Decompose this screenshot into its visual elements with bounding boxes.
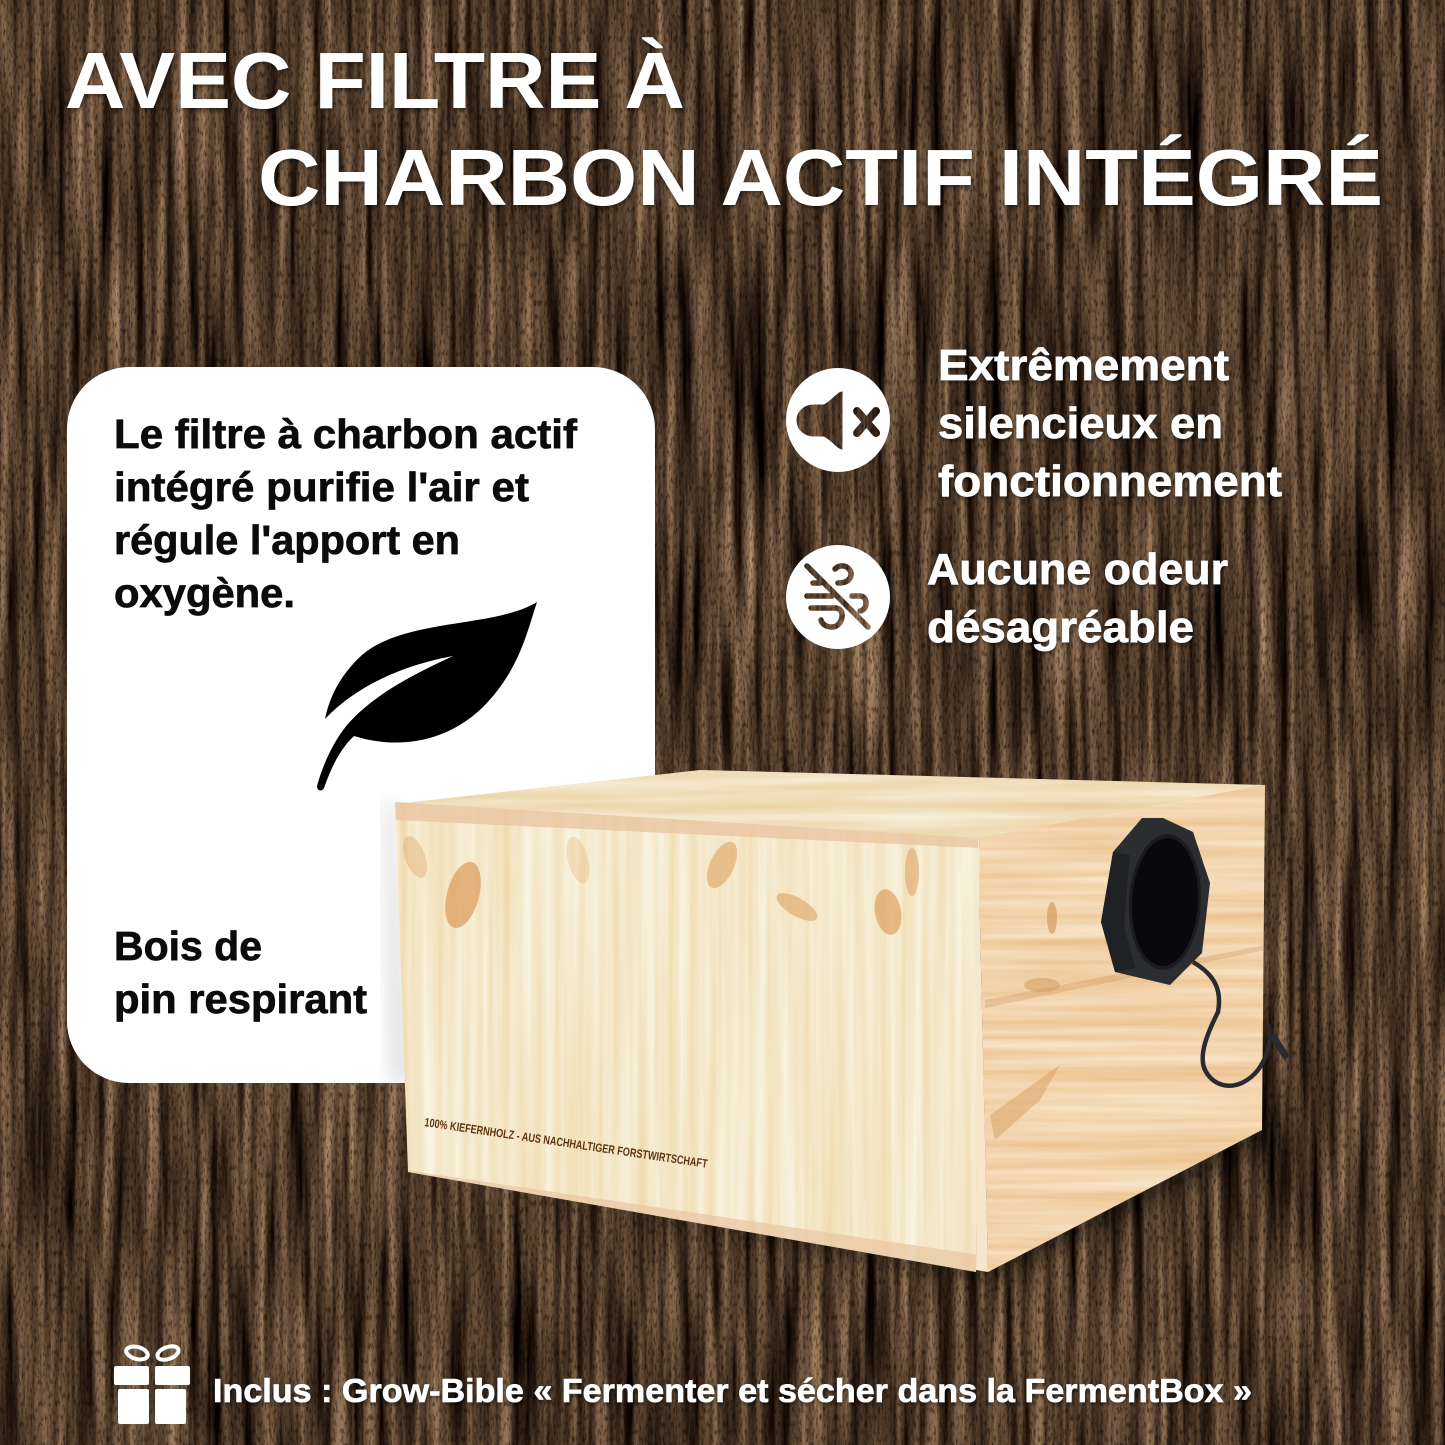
icon: leaf [317, 602, 537, 790]
panel: description card [67, 367, 655, 1083]
icon: muted speaker [786, 368, 890, 472]
feature: silent [780, 341, 1282, 506]
footer: included gift [114, 1344, 1252, 1424]
text: no bad smell [927, 545, 1228, 652]
card text: charcoal filter: intégré purifie l'air et [114, 464, 529, 510]
box right face [975, 780, 1270, 1275]
icon: gift [114, 1344, 190, 1424]
card text: charcoal filter: oxygène. [114, 570, 295, 616]
footer text: Inclus : Grow-Bible « Fermenter et sécher dans la FermentBox » [213, 1372, 1252, 1409]
engraved label: 100% KIEFERNHOLZ - AUS NACHHALTIGER FORSTWIRTSCHAFT [424, 1115, 709, 1171]
title [65, 36, 1383, 222]
card text: charcoal filter [114, 411, 577, 616]
feature: no odour [780, 539, 1228, 655]
text: silent operation: Extrêmement [938, 341, 1229, 390]
card text: pine wood [114, 923, 367, 1022]
box corner edge [976, 836, 988, 1272]
product: pine wood box [385, 765, 1287, 1280]
card text: charcoal filter: Le filtre à charbon actif [114, 411, 577, 457]
text: no bad smell: désagréable [927, 603, 1194, 652]
title: CHARBON ACTIF INTÉGRÉ [258, 133, 1383, 222]
icon: crossed-out wind [786, 545, 890, 649]
box front face [390, 795, 985, 1280]
box top face [406, 770, 1264, 838]
text: no bad smell: Aucune odeur [927, 545, 1228, 594]
card text: pine wood: pin respirant [114, 976, 367, 1022]
title: AVEC FILTRE À [65, 36, 685, 125]
text: silent operation [938, 341, 1282, 506]
card text: pine wood: Bois de [114, 923, 262, 969]
text: silent operation: fonctionnement [938, 457, 1282, 506]
wood knots [398, 833, 919, 937]
text: silent operation: silencieux en [938, 399, 1223, 448]
filter port and cable [1101, 818, 1287, 1086]
card text: charcoal filter: régule l'apport en [114, 517, 460, 563]
